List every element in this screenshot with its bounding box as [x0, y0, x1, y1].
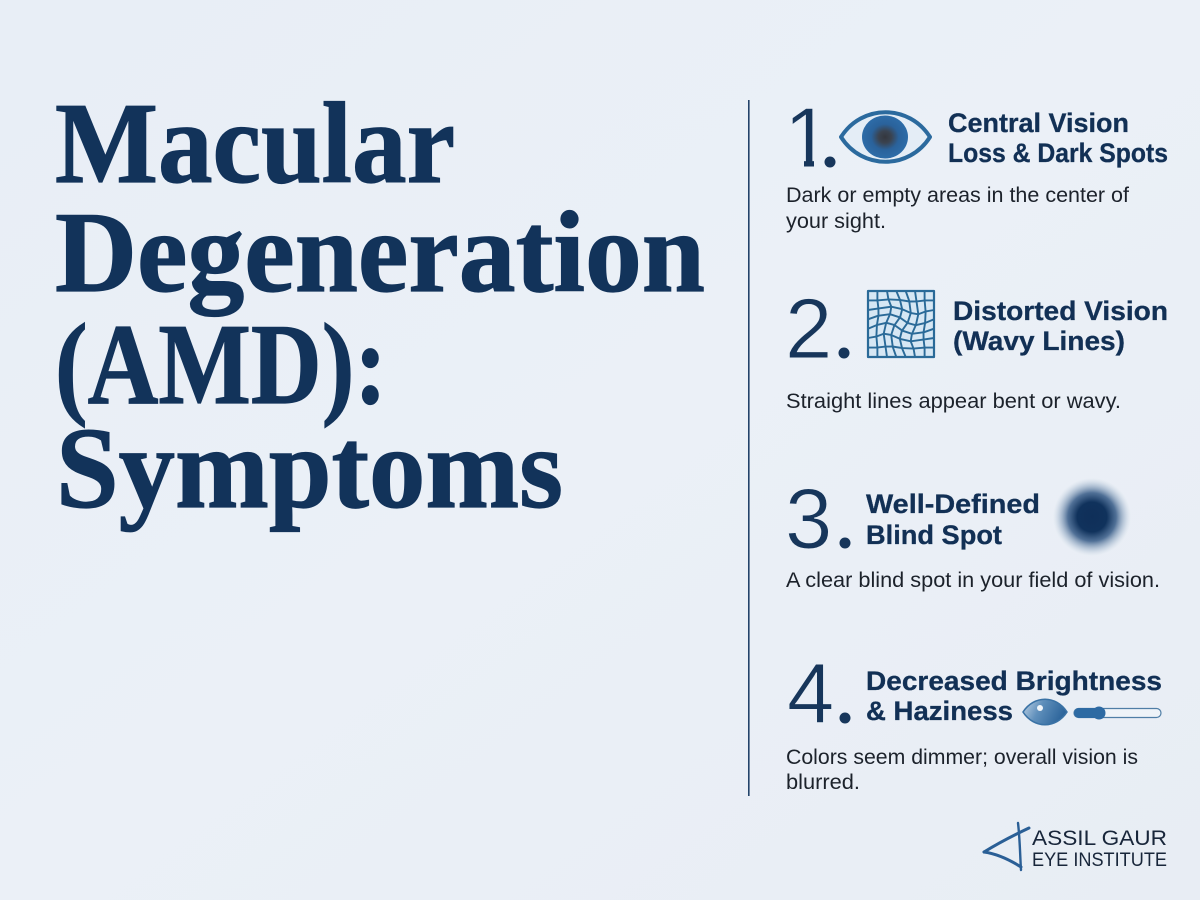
icon: hazy eye — [1023, 699, 1067, 725]
heading 3: Well-Defined — [866, 489, 1040, 519]
description 4: Colors seem dimmer; overall vision is — [786, 746, 1138, 769]
title: Degeneration — [55, 189, 705, 317]
symptom 3: blind spot — [785, 472, 1160, 592]
logo — [984, 823, 1167, 871]
number 3: 3 — [785, 472, 832, 567]
heading 2 — [953, 296, 1168, 356]
heading 2: Distorted Vision — [953, 296, 1168, 326]
icon: brightness slider — [1074, 706, 1161, 720]
vertical divider — [748, 100, 750, 796]
logo text: EYE INSTITUTE — [1032, 850, 1167, 871]
description 4: blurred. — [786, 771, 860, 794]
icon: blurred blind spot — [1053, 478, 1131, 556]
symptom 4: decreased brightness — [786, 647, 1162, 794]
icon: logo mark — [984, 823, 1029, 870]
number 1 — [792, 108, 836, 168]
description 1 — [786, 184, 1129, 233]
symptom 2: distorted vision — [785, 282, 1168, 413]
heading 4 — [866, 666, 1162, 726]
heading 1: Loss & Dark Spots — [948, 138, 1168, 168]
heading 3: Blind Spot — [866, 520, 1002, 550]
heading 1 — [948, 108, 1168, 168]
heading 2: (Wavy Lines) — [953, 326, 1125, 356]
heading 3 — [866, 489, 1040, 550]
title: Symptoms — [56, 405, 563, 533]
number 1: . — [823, 120, 837, 176]
number 4: 4 — [787, 647, 834, 742]
number 4: . — [838, 676, 852, 732]
heading 4: & Haziness — [866, 696, 1013, 726]
logo text — [1032, 827, 1167, 871]
description 4 — [786, 746, 1138, 794]
number 1: 1 — [784, 91, 831, 186]
description 3: A clear blind spot in your field of vision. — [786, 569, 1160, 592]
description 1: your sight. — [786, 210, 886, 233]
heading 1: Central Vision — [948, 108, 1129, 138]
description 2: Straight lines appear bent or wavy. — [786, 390, 1121, 413]
number 2: . — [837, 312, 851, 368]
description 1: Dark or empty areas in the center of — [786, 184, 1129, 207]
logo text: ASSIL GAUR — [1032, 827, 1167, 850]
title — [55, 80, 705, 533]
number 2: 2 — [785, 282, 832, 377]
title: Macular — [55, 80, 455, 208]
icon: distorted grid — [868, 291, 934, 357]
symptom 1: central vision loss — [786, 108, 1168, 232]
icon: eye with dark central spot — [841, 112, 930, 162]
title: (AMD): — [55, 301, 387, 429]
heading 4: Decreased Brightness — [866, 666, 1162, 696]
number 3: . — [838, 502, 852, 558]
